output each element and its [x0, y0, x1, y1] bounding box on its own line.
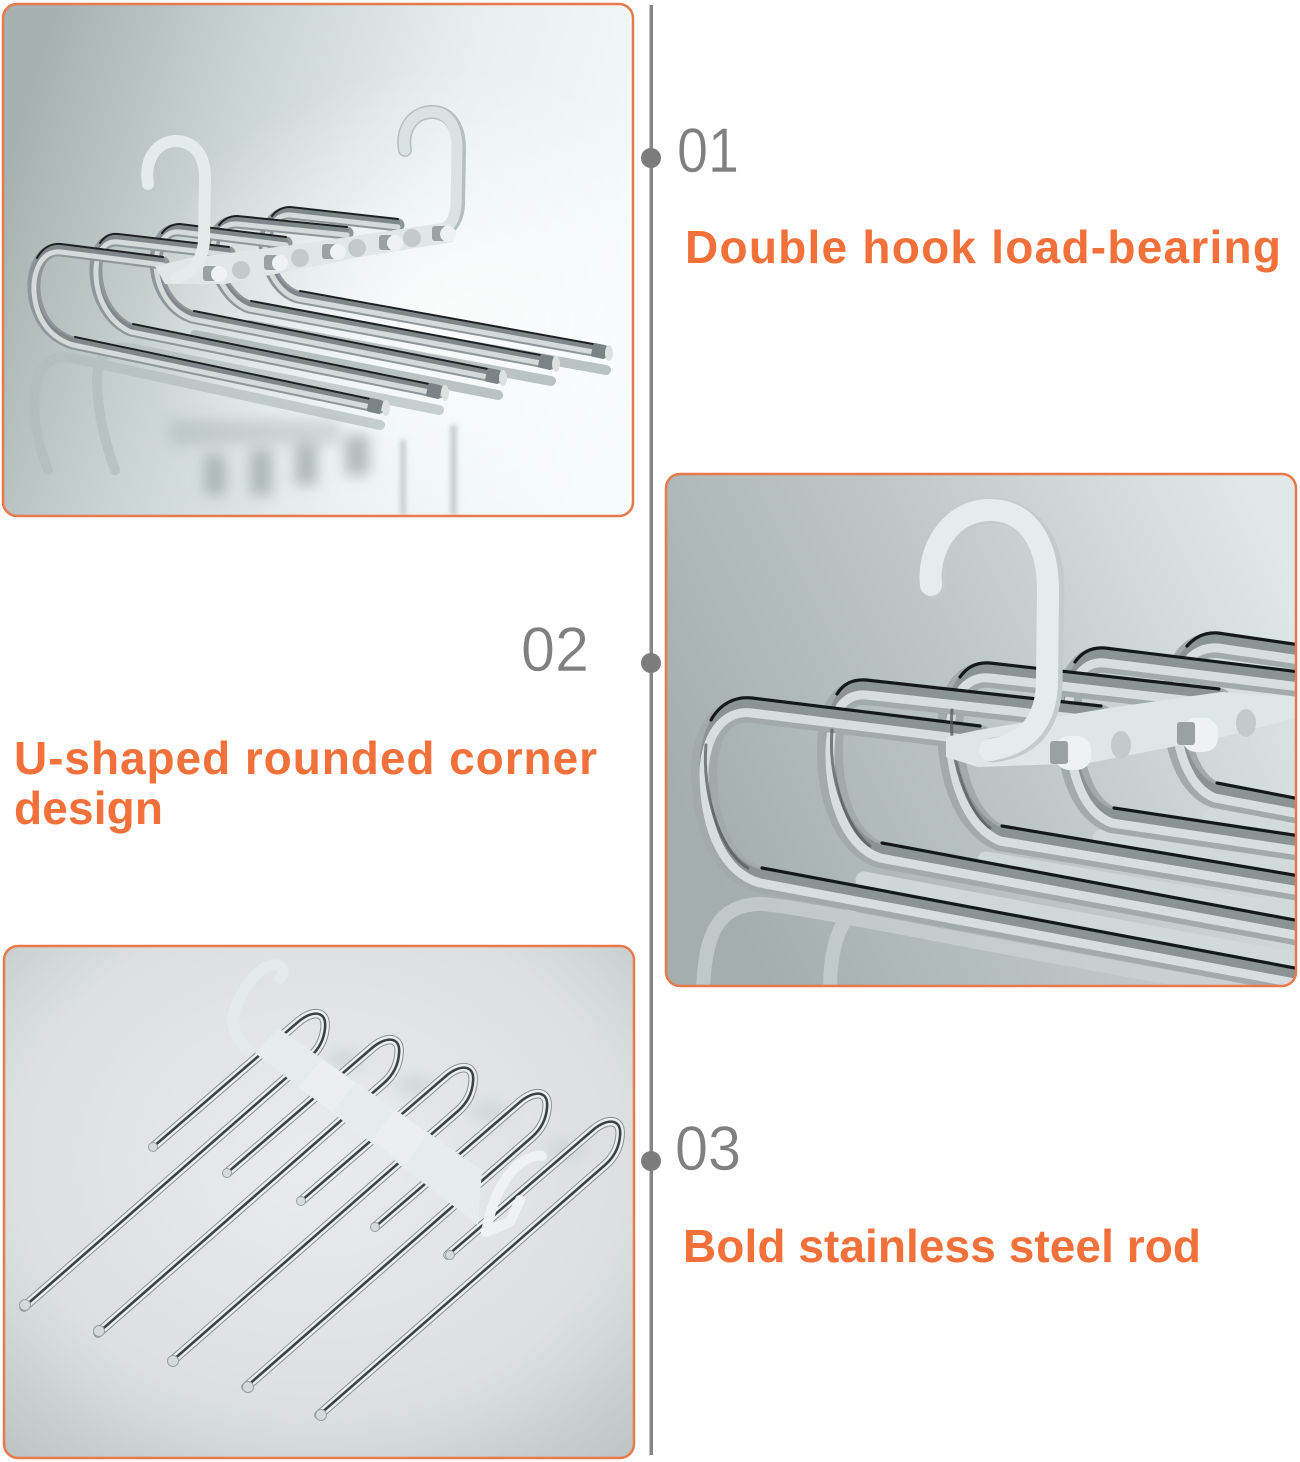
vertical timeline — [641, 5, 661, 1455]
heading: U-shaped design: design — [14, 782, 163, 834]
slat with pegs — [155, 222, 456, 284]
heading: stainless rod: Bold stainless steel rod — [683, 1220, 1201, 1272]
panel frame 2 — [666, 474, 1296, 986]
close-up reflection — [696, 830, 1238, 985]
rod end caps — [20, 1142, 454, 1420]
panel: folded stainless rods — [4, 946, 634, 1458]
rod end caps — [366, 343, 613, 416]
rods: five stainless U rods — [34, 207, 604, 409]
heading: U-shaped design — [14, 732, 597, 834]
front hook — [147, 141, 205, 278]
back hook — [404, 112, 459, 234]
number 01: 01 — [677, 116, 739, 186]
rods: diagonal stainless rods — [24, 1014, 620, 1415]
close-up slat with pegs — [946, 692, 1296, 770]
soft shadows behind rods — [325, 1051, 585, 1159]
front translucent hook — [486, 1156, 542, 1232]
panel: rounded corner close-up — [666, 474, 1300, 1000]
rods: close-up U rods — [704, 633, 1300, 984]
rear translucent hook — [233, 965, 283, 1050]
panel frame 1 — [3, 4, 633, 516]
heading: U-shaped design: U-shaped rounded corner — [14, 732, 597, 784]
heading: double hook: Double hook load-bearing — [685, 221, 1281, 273]
timeline dot 01 — [641, 148, 661, 168]
number 03: 03 — [675, 1114, 741, 1184]
panel frame 3 — [4, 946, 634, 1458]
close-up white hook — [931, 510, 1052, 750]
hanger reflection — [34, 315, 606, 515]
timeline dot 02 — [641, 653, 661, 673]
number 02: 02 — [521, 615, 589, 685]
panel: double hook hanger photo — [3, 4, 633, 516]
translucent slat — [255, 1028, 482, 1225]
timeline dot 03 — [641, 1151, 661, 1171]
